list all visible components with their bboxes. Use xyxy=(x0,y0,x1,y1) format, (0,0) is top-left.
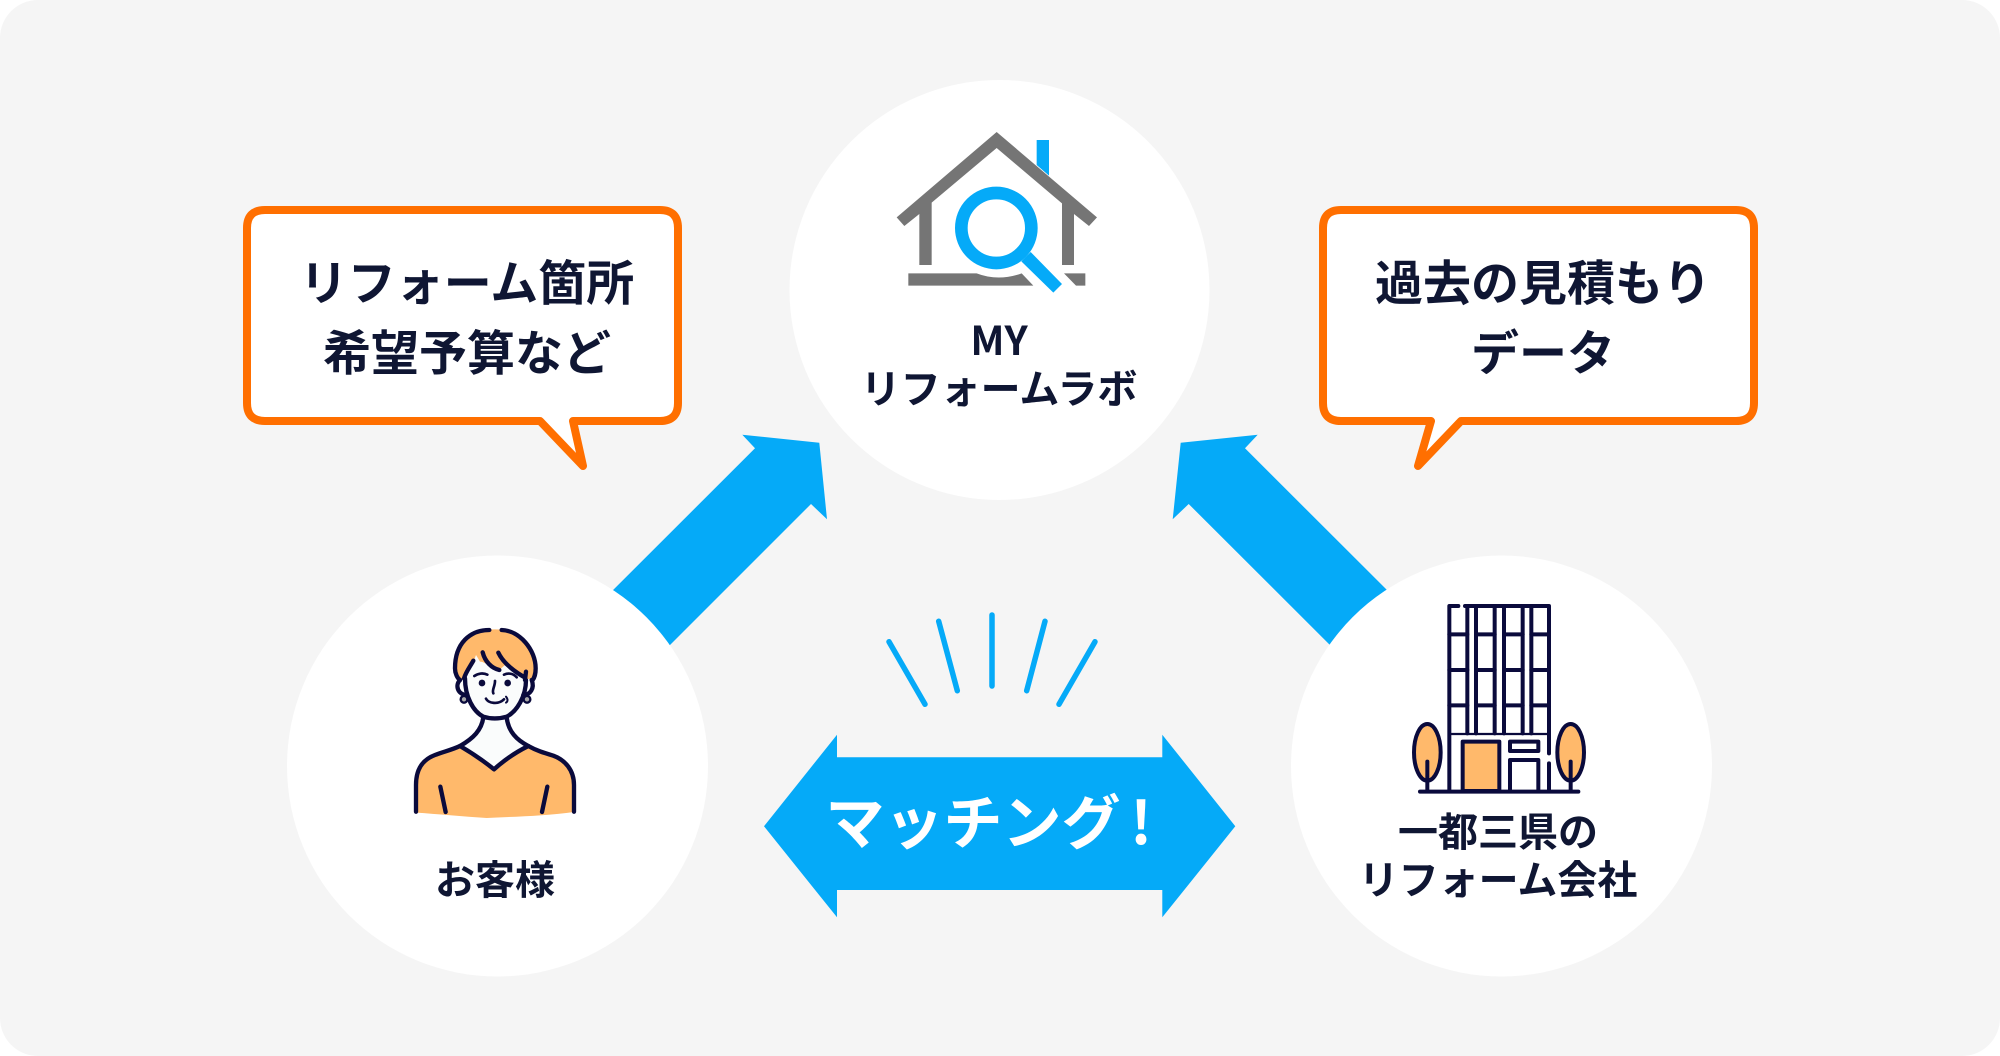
icon: house with magnifier xyxy=(897,132,1097,293)
bubble shape xyxy=(1323,210,1754,466)
icon: office building with trees xyxy=(1414,606,1584,792)
label: リフォームラボ: リフォームラボ xyxy=(861,357,1137,415)
panel: MY reform lab xyxy=(790,80,1210,500)
text: 希望予算など: 希望予算など xyxy=(323,314,611,384)
arrow shape xyxy=(764,735,1235,917)
panel: reform company xyxy=(1291,556,1712,976)
circle: reform company xyxy=(1291,556,1712,976)
speech bubble: past estimates xyxy=(1323,210,1754,466)
label: 一都三県の: 一都三県の xyxy=(1398,800,1598,858)
arrow: customer to MY reform lab xyxy=(573,435,827,685)
bubble shape xyxy=(247,210,678,466)
label: リフォーム会社: リフォーム会社 xyxy=(1359,848,1637,906)
label: MY: MY xyxy=(970,309,1028,367)
text: マッチング！: マッチング! xyxy=(825,776,1152,861)
panel: customer xyxy=(287,556,708,976)
circle: MY reform lab xyxy=(790,80,1210,500)
speech bubble: customer request xyxy=(247,210,678,466)
arrow: reform company to MY reform lab xyxy=(1173,435,1427,685)
circle: customer xyxy=(287,556,708,976)
text: 過去の見積もり: 過去の見積もり xyxy=(1375,244,1711,314)
burst lines above matching arrow xyxy=(889,615,1095,704)
text: データ: データ xyxy=(1471,314,1615,384)
double-headed arrow: matching xyxy=(764,735,1235,917)
text: リフォーム箇所: リフォーム箇所 xyxy=(300,244,634,314)
icon: customer person xyxy=(415,629,575,818)
label: お客様: お客様 xyxy=(435,848,555,906)
